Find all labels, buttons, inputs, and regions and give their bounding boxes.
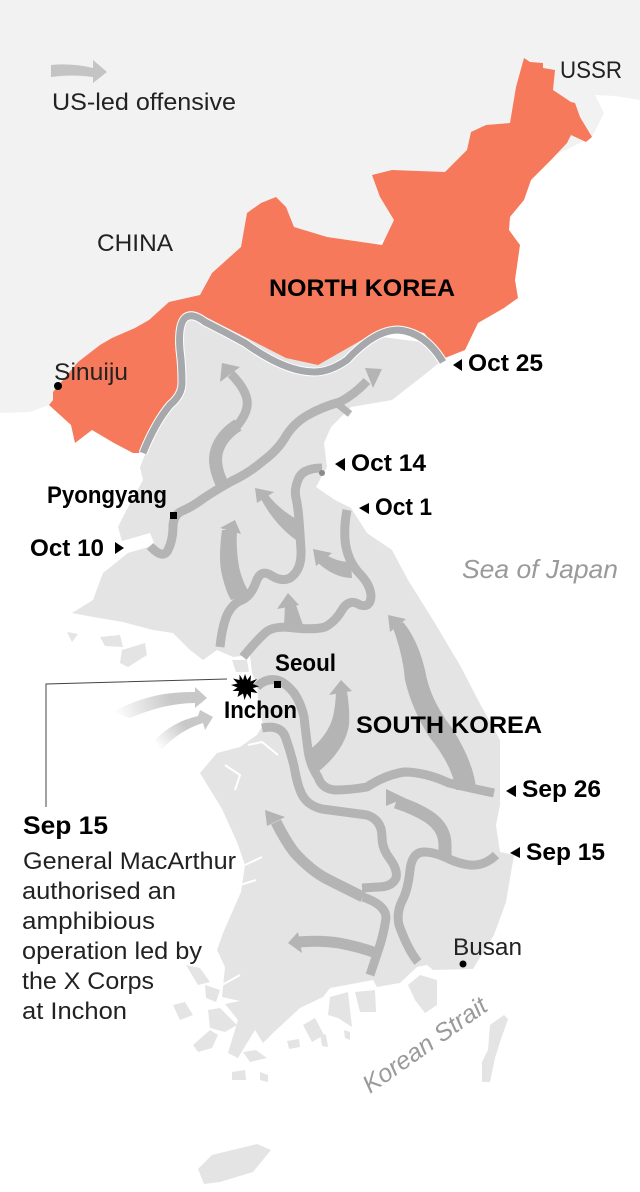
callout body text: General MacArthur: [23, 848, 236, 875]
callout: Sep 15 Inchon landing: [22, 812, 236, 1025]
coastal islands of the west and south: [67, 632, 437, 1082]
callout body text: amphibious: [22, 908, 155, 935]
arrow: Sep 15 line to Busan perimeter: [398, 852, 496, 962]
label: Seoul with marker: Seoul: [275, 650, 336, 677]
panel: North Korea: [49, 58, 592, 453]
panel: surrounding land (China and USSR): [0, 0, 640, 413]
panel: Korean peninsula south of the front: [67, 312, 514, 1082]
arrow: branch to north-west near Oct 14 line: [255, 488, 298, 540]
label: USSR: USSR: [560, 57, 622, 84]
callout body text: authorised an: [22, 878, 176, 905]
arrow: westward branch from Oct 1 line: [313, 549, 352, 578]
island: Jeju: [198, 1144, 271, 1184]
callout body text: [22, 848, 236, 1025]
callout body text: at Inchon: [22, 998, 127, 1025]
legend arrow: US-led offensive: [51, 60, 107, 83]
arrow: sea approach two: [155, 710, 213, 750]
arrow: sea approach one: [113, 687, 207, 718]
arrow: north branch from Pyongyang road: [216, 363, 247, 488]
legend label: US-led offensive: [52, 89, 236, 116]
arrow: north toward central Korea: [306, 680, 352, 772]
date label: Oct 10: Oct 10: [30, 535, 104, 562]
date label: Oct 1: Oct 1: [375, 494, 432, 521]
arrow: large curve to the west: [265, 810, 386, 975]
arrow: westward branch in the south: [288, 932, 376, 953]
callout body text: operation led by: [22, 938, 202, 965]
white inlets along the west coast: [222, 742, 278, 985]
label: Sinuiju with dot: Sinuiju: [54, 359, 128, 386]
date label: Sep 26: Sep 26: [522, 776, 601, 803]
leader line for Inchon callout: [46, 679, 227, 807]
label: Sea of Japan: Sea of Japan: [462, 554, 618, 584]
marker: Oct 14 point: [319, 470, 325, 476]
label: Inchon: Inchon: [224, 697, 297, 724]
arrow: short northward branch: [277, 593, 303, 626]
date label: Oct 25: Oct 25: [468, 350, 543, 377]
icon: Inchon landing star: [231, 674, 259, 700]
island: Tsushima: [482, 1015, 508, 1082]
arrow: Oct 10 landing through Pyongyang to the north-east: [150, 368, 382, 554]
label: Seoul with marker: [274, 650, 336, 688]
label: North Korea: NORTH KOREA: [269, 275, 455, 302]
arrow: Oct 1 line along the east coast: [243, 510, 371, 657]
label: Korean Strait: Korean Strait: [357, 991, 493, 1099]
date label: Oct 14: Oct 14: [351, 450, 427, 477]
label: China: CHINA: [97, 230, 173, 257]
label: South Korea: SOUTH KOREA: [356, 712, 542, 739]
date label: Sep 15 east coast: Sep 15: [526, 839, 605, 866]
callout heading: Sep 15: [23, 812, 108, 840]
arrow: thick northward branch: [220, 520, 250, 600]
arrow: north-west branch from Sep 15 line: [386, 789, 445, 858]
label: Busan with dot: Busan: [453, 934, 522, 961]
callout body text: the X Corps: [22, 968, 154, 995]
arrow: Oct 14 line south to Seoul area: [220, 468, 322, 647]
arrow: Sep 26 line to Inchon: [257, 680, 494, 793]
label: Pyongyang with marker: Pyongyang: [47, 482, 167, 509]
arrow: east-coast advance from Sep 26: [388, 615, 476, 790]
front line: northern limit of the advance: [143, 316, 443, 453]
arrow: line south from Inchon: [262, 727, 396, 888]
